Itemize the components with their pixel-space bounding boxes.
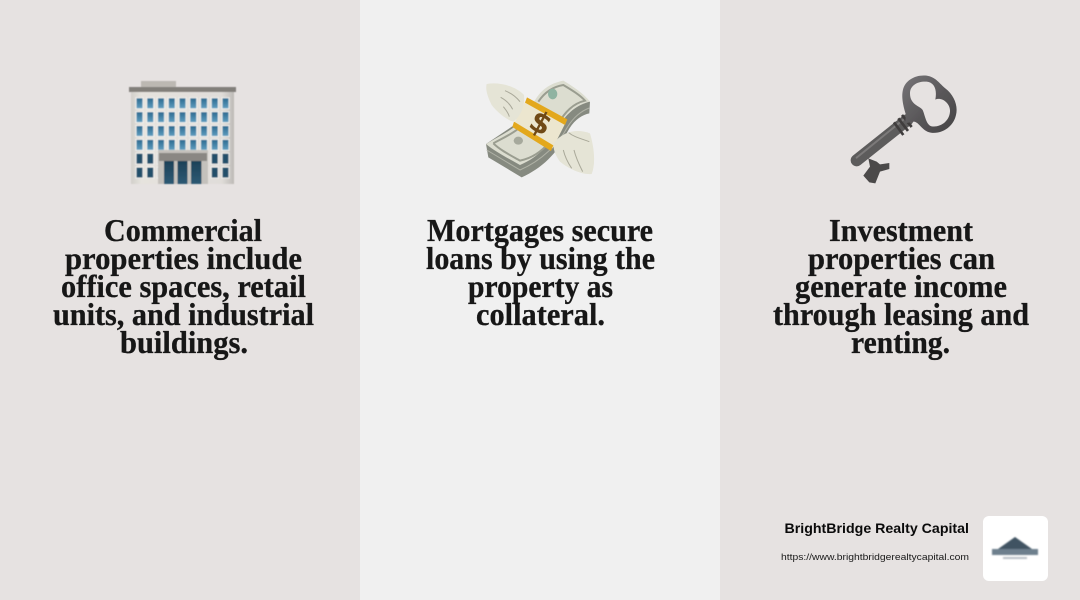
icon: money with wings — [486, 81, 594, 177]
panel: investment properties — [720, 0, 1080, 600]
heading: investment text: renting. — [851, 324, 950, 360]
heading: mortgages text: property as — [468, 268, 613, 304]
icon: office building — [129, 81, 236, 184]
icon: old key — [857, 75, 957, 183]
heading: investment text: Investment — [829, 212, 973, 248]
heading: mortgages text: loans by using the — [426, 240, 655, 276]
heading: commercial properties text: office spaces, retail — [61, 268, 306, 304]
heading: investment text: properties can — [808, 240, 995, 276]
panel: commercial properties — [0, 0, 360, 600]
heading: mortgages text: Mortgages secure — [427, 212, 653, 248]
heading: commercial properties text: properties include — [65, 240, 302, 276]
panel: mortgages — [360, 0, 720, 600]
heading: mortgages text: collateral. — [476, 296, 605, 332]
logo tile — [983, 516, 1048, 581]
heading: commercial properties text: buildings. — [120, 324, 248, 360]
company name: BrightBridge Realty Capital — [784, 520, 969, 536]
company url: https://www.brightbridgerealtycapital.com — [781, 552, 969, 563]
heading: commercial properties text: Commercial — [104, 212, 262, 248]
footer: company brand — [781, 516, 1048, 581]
icon: money with wings: $ — [524, 103, 558, 143]
heading: commercial properties text: units, and industrial — [53, 296, 314, 332]
icon: logo roof mark — [992, 537, 1038, 559]
heading: investment text: through leasing and — [773, 296, 1029, 332]
heading: investment text: generate income — [795, 268, 1007, 304]
